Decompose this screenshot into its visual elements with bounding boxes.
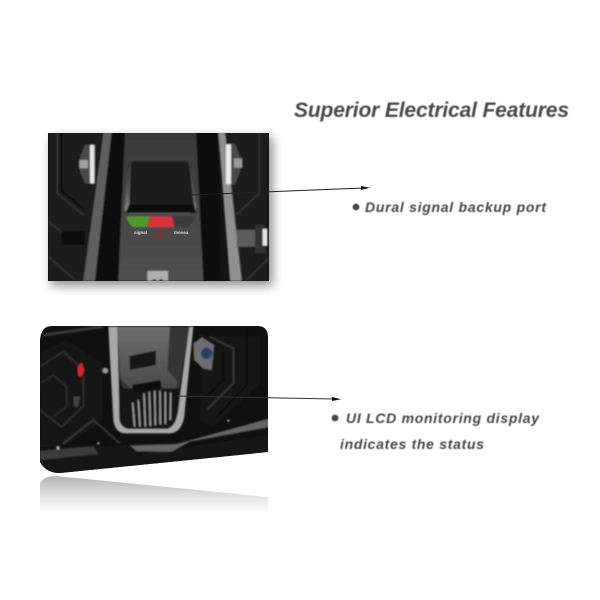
hex armour	[40, 340, 102, 447]
port	[125, 161, 196, 213]
feature: UI LCD monitoring display: UI LCD monitoring display	[346, 410, 540, 426]
indicators	[126, 216, 149, 227]
feature: UI LCD monitoring display: indicates the status	[340, 436, 484, 452]
arrow: to LCD display	[177, 396, 341, 401]
panel: signal backup port photo	[48, 132, 273, 286]
lower bar	[40, 445, 267, 473]
panel: signal backup port photo: mosea	[174, 230, 189, 235]
latch lower right	[237, 230, 257, 247]
reflection	[40, 476, 268, 513]
strips	[83, 132, 112, 281]
panel: LCD monitoring display photo	[40, 326, 269, 513]
latch with blue	[193, 337, 214, 370]
central housing	[108, 327, 193, 433]
title: Superior Electrical Features	[294, 99, 569, 122]
vent fins	[133, 391, 171, 427]
arrow: to backup port	[190, 186, 370, 195]
vent	[134, 392, 140, 393]
side armour	[48, 132, 102, 281]
latch left	[80, 145, 95, 183]
label block	[147, 271, 168, 281]
latch right	[226, 143, 240, 184]
LCD window	[129, 351, 156, 370]
red clip	[78, 363, 84, 377]
port labels: signal	[134, 230, 147, 235]
feature: UI LCD monitoring display	[332, 410, 540, 452]
feature: dural signal backup port: Dural signal backup port	[365, 199, 547, 215]
